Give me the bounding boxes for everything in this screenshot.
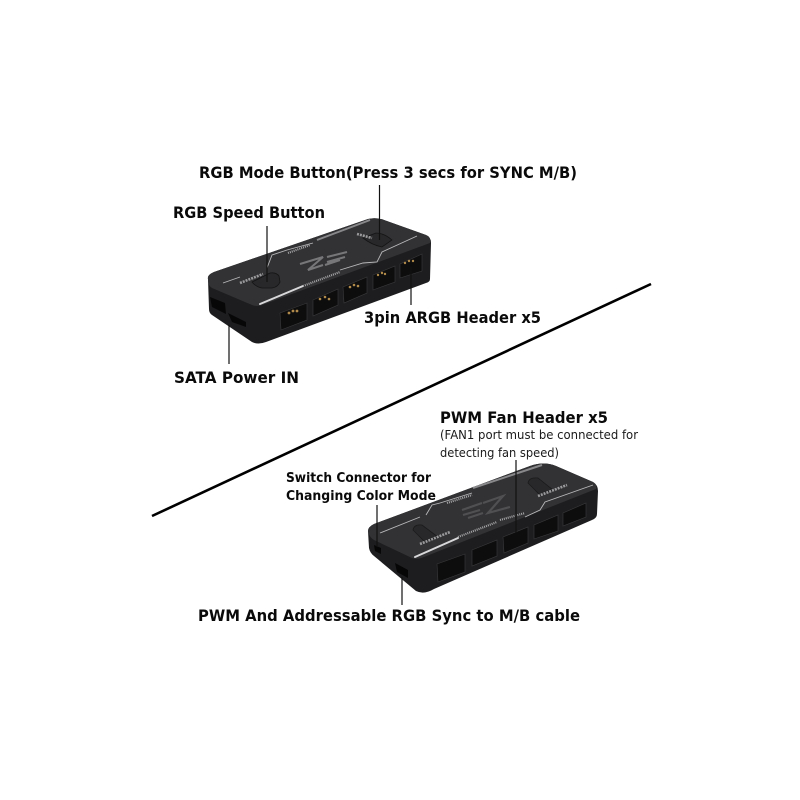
label: PWM fan header: detecting fan speed) [440,446,559,460]
device: PWM hub top view [368,464,598,593]
label: switch connector: Switch Connector for [286,470,431,486]
button captions [420,485,567,544]
RGB speed button [252,273,280,288]
hub top face [368,464,597,559]
SATA power port [210,297,246,327]
label: PWM fan header [440,408,638,533]
sync cable port [395,563,408,578]
label: PWM fan header: PWM Fan Header x5 [440,408,608,427]
label: RGB mode button: RGB Mode Button(Press 3 secs for SYNC M/B) [199,163,577,182]
PWM fan ports [437,503,586,582]
label: switch connector [286,470,436,547]
hub silver trim [380,465,593,557]
label: SATA power in [174,325,299,387]
gold pins [288,260,414,314]
device: ARGB hub top view [208,218,431,344]
hub silver trim [223,220,417,304]
RGB speed button [528,478,553,495]
label: PWM fan header: (FAN1 port must be connected for [440,428,638,442]
RGB mode button [413,525,438,542]
switch connector port [374,545,381,554]
logo [300,252,347,270]
logo [462,496,510,518]
button captions [240,234,372,283]
hub body [208,218,431,344]
label: PWM and addressable RGB sync: PWM And Addressable RGB Sync to M/B cable [198,606,580,625]
hub body [368,464,598,593]
RGB mode button [363,233,392,247]
diagonal divider line [152,284,651,516]
label: 3pin ARGB header: 3pin ARGB Header x5 [364,308,541,327]
label: RGB speed button: RGB Speed Button [173,203,325,222]
label: switch connector: Changing Color Mode [286,488,436,504]
hub top face [208,218,430,306]
3pin ARGB ports [280,254,422,330]
label: SATA power in: SATA Power IN [174,368,299,387]
